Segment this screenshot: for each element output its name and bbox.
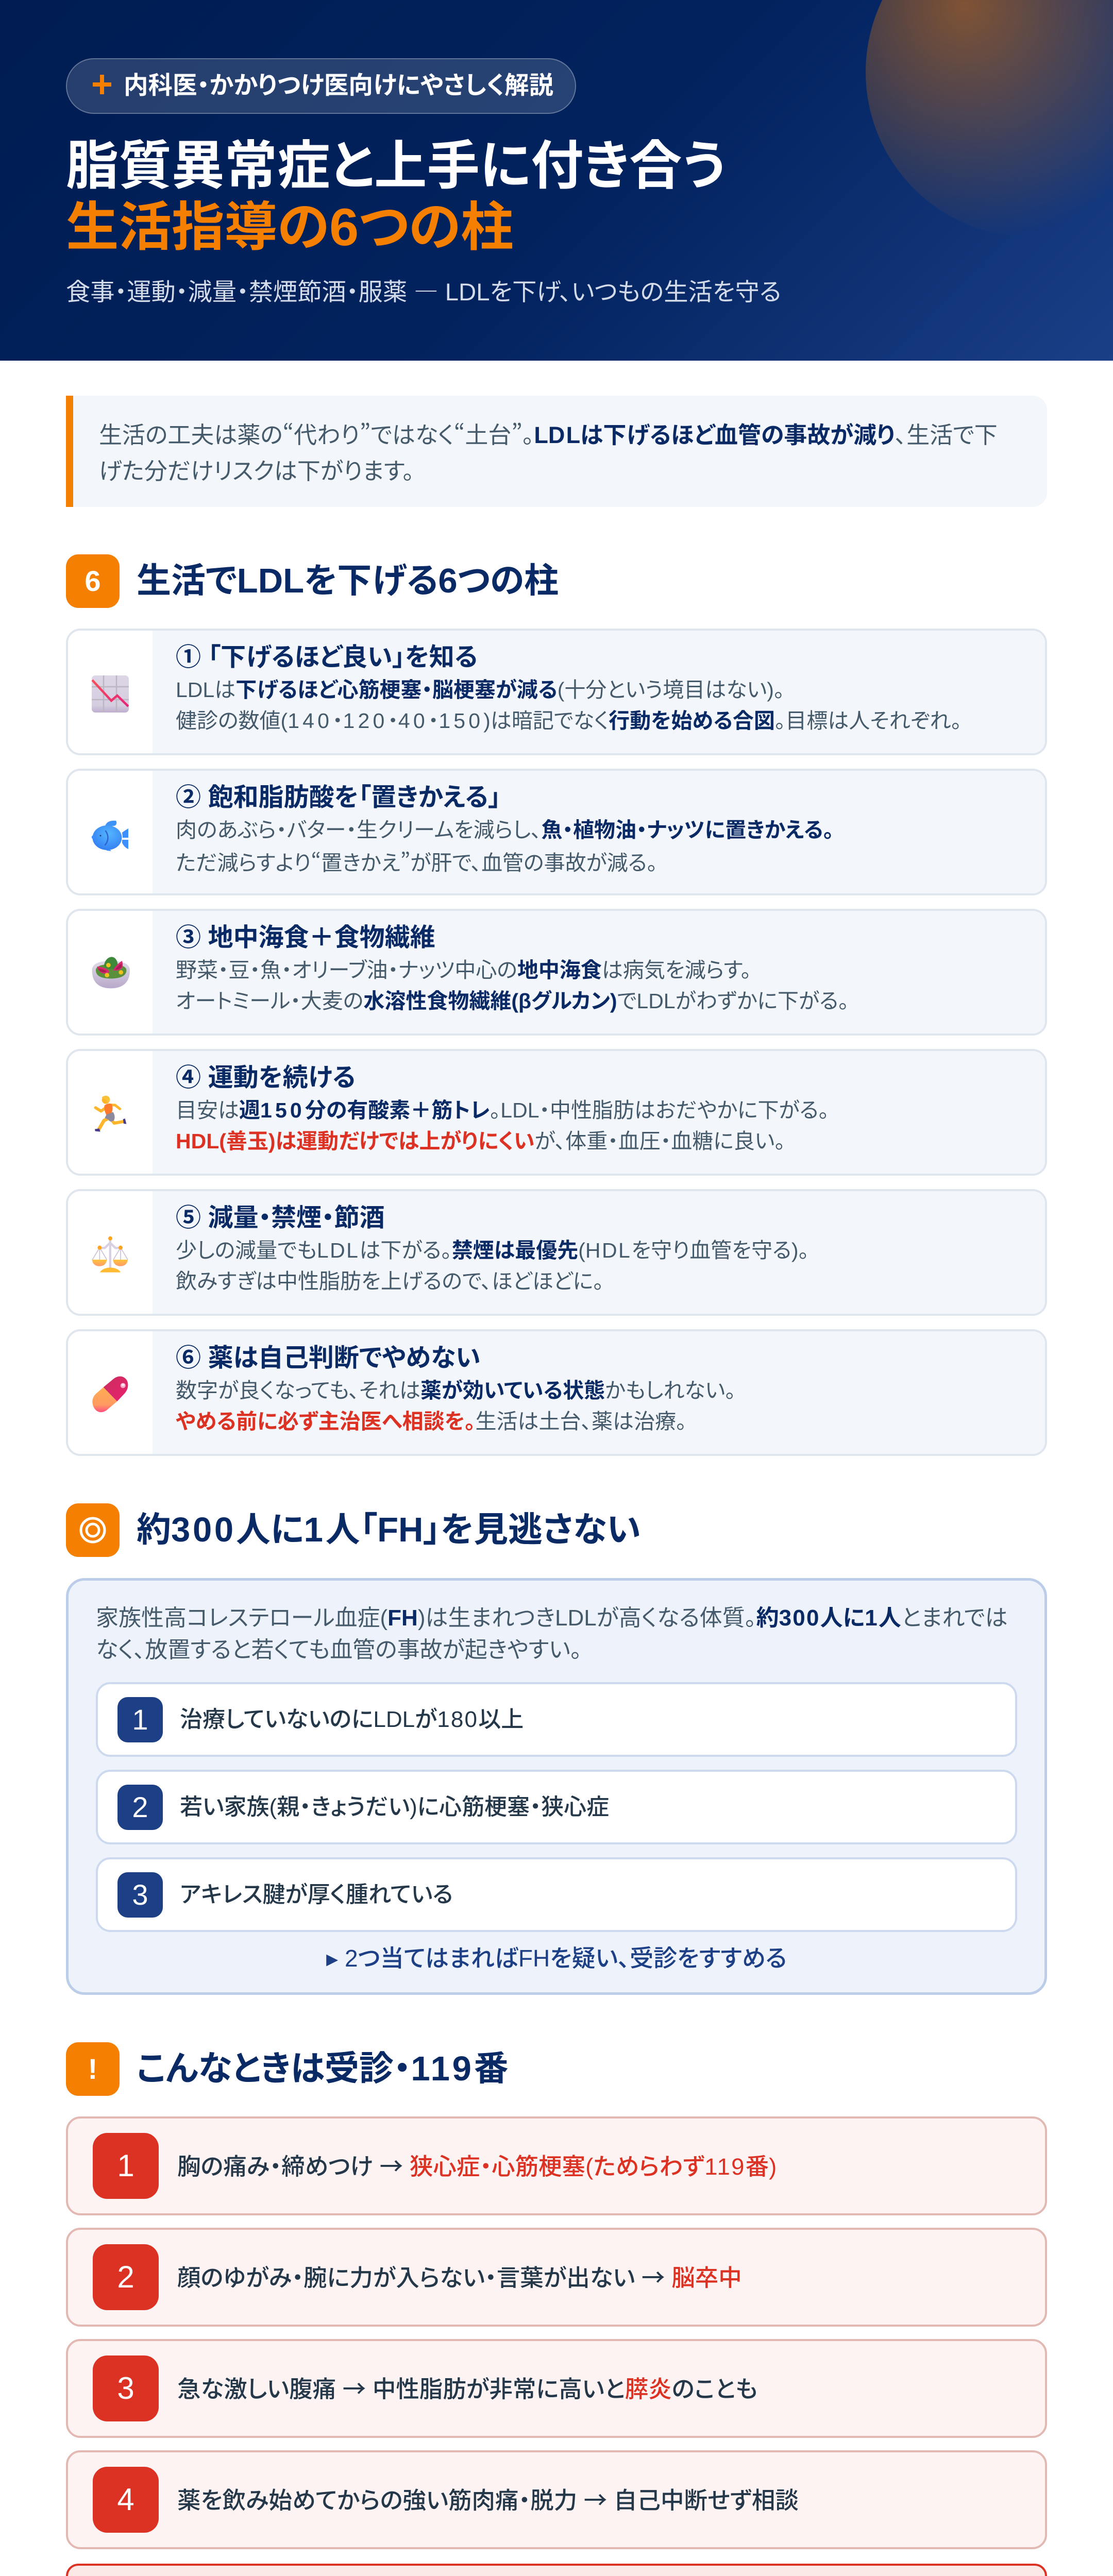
number 1: 1 <box>132 1703 148 1736</box>
number 2: 2 <box>117 2260 134 2294</box>
number 1: 1 <box>117 2148 134 2183</box>
pillar 6 line 2: やめる前に必ず主治医へ相談を。生活は土台、薬は治療。 <box>176 1410 686 1433</box>
icon: runner <box>94 1095 127 1132</box>
flag 1 text: 胸の痛み・締めつけ → 狭心症・心筋梗塞(ためらわず119番) <box>177 2148 777 2182</box>
FH checklist item 3 <box>96 1857 1017 1932</box>
number 1 <box>93 2133 159 2199</box>
number 2 <box>117 1785 163 1830</box>
flag 3 text: 急な激しい腹痛 → 中性脂肪が非常に高いと膵炎のことも <box>177 2370 757 2404</box>
pillar 3 title: ③ 地中海食＋食物繊維 <box>176 924 435 952</box>
pillar 2 title: ② 飽和脂肪酸を「置きかえる」 <box>176 784 501 811</box>
pillar 1 title: ① 「下げるほど良い」を知る <box>176 643 478 671</box>
FH description: なく、放置すると若くても血管の事故が起きやすい。 <box>96 1637 582 1663</box>
number 3 <box>93 2355 159 2421</box>
item 3 text: アキレス腱が厚く腫れている <box>180 1882 453 1907</box>
red flag 3 <box>66 2339 1047 2438</box>
heading text: こんなときは受診・119番 <box>137 2049 509 2088</box>
number 4: 4 <box>117 2482 134 2517</box>
pillar 3 line 1: 野菜・豆・魚・オリーブ油・ナッツ中心の地中海食は病気を減らす。 <box>176 958 751 982</box>
card: pillar 1 <box>66 629 1047 755</box>
title line 2: 生活指導の6つの柱 <box>66 197 514 257</box>
pillar 2 line 1: 肉のあぶら・バター・生クリームを減らし、魚・植物油・ナッツに置きかえる。 <box>176 818 834 842</box>
card: pillar 6 <box>66 1329 1047 1456</box>
item 2 text: 若い家族(親・きょうだい)に心筋梗塞・狭心症 <box>180 1794 609 1820</box>
icon: number 6 <box>66 554 120 608</box>
icon: capsule <box>92 1377 128 1412</box>
flag 2 text: 顔のゆがみ・腕に力が入らない・言葉が出ない → 脳卒中 <box>177 2259 742 2293</box>
icon: balance scale <box>92 1236 128 1273</box>
icon: salad bowl <box>92 957 130 988</box>
flag 4 text: 薬を飲み始めてからの強い筋肉痛・脱力 → 自己中断せず相談 <box>177 2482 799 2516</box>
pillar 5 line 1: 少しの減量でもLDLは下がる。禁煙は最優先(HDLを守り血管を守る)。 <box>176 1239 809 1262</box>
card: pillar 5 <box>66 1189 1047 1316</box>
card: pillar 4 <box>66 1049 1047 1176</box>
card: pillar 3 <box>66 909 1047 1036</box>
intro callout <box>66 396 1047 507</box>
panel: FH <box>66 1578 1047 1995</box>
red flag 4 <box>66 2450 1047 2549</box>
FH checklist item 2 <box>96 1770 1017 1844</box>
pillar 4 line 2: HDL(善玉)は運動だけでは上がりにくいが、体重・血圧・血糖に良い。 <box>176 1129 785 1153</box>
pillar 1 line 2: 健診の数値(140・120・40・150)は暗記でなく行動を始める合図。目標は人それぞれ。 <box>176 709 962 733</box>
decorative glow circle <box>866 0 1113 237</box>
number 3 <box>117 1872 163 1918</box>
pillar 6 line 1: 数字が良くなっても、それは薬が効いている状態かもしれない。 <box>176 1379 736 1402</box>
red flag 2 <box>66 2228 1047 2327</box>
number 3: 3 <box>132 1878 148 1911</box>
number 2: 2 <box>132 1791 148 1823</box>
icon: fish <box>92 820 128 851</box>
icon: plus <box>93 75 111 94</box>
icon: double circle <box>66 1503 120 1557</box>
title line 1: 脂質異常症と上手に付き合う <box>66 136 726 195</box>
heading text: 生活でLDLを下げる6つの柱 <box>137 562 559 600</box>
section heading: FH <box>66 1503 641 1557</box>
red flag 1 <box>66 2116 1047 2215</box>
warning banner <box>66 2564 1047 2576</box>
pillar 4 title: ④ 運動を続ける <box>176 1064 356 1092</box>
number 4 <box>93 2467 159 2533</box>
item 1 text: 治療していないのにLDLが180以上 <box>180 1707 524 1732</box>
callout text: 生活の工夫は薬の“代わり”ではなく“土台”。LDLは下げるほど血管の事故が減り、生活で下 <box>99 416 998 450</box>
callout text: げた分だけリスクは下がります。 <box>99 458 414 484</box>
pillar 3 line 2: オートミール・大麦の水溶性食物繊維(βグルカン)でLDLがわずかに下がる。 <box>176 989 849 1013</box>
badge text: 内科医・かかりつけ医向けにやさしく解説 <box>124 72 553 99</box>
subtitle: 食事・運動・減量・禁煙節酒・服薬 — LDLを下げ、いつもの生活を守る <box>66 272 781 308</box>
header panel <box>0 0 1113 361</box>
FH conclusion: ▸ 2つ当てはまればFHを疑い、受診をすすめる <box>326 1945 787 1972</box>
pillar 4 line 1: 目安は週150分の有酸素＋筋トレ。LDL・中性脂肪はおだやかに下がる。 <box>176 1098 829 1122</box>
pillar 2 line 2: ただ減らすより“置きかえ”が肝で、血管の事故が減る。 <box>176 845 657 876</box>
section heading: warning signs <box>66 2042 1047 2096</box>
icon: exclamation <box>66 2042 120 2096</box>
icon: exclamation: ! <box>88 2053 97 2085</box>
number 3: 3 <box>117 2371 134 2405</box>
pillar 5 line 2: 飲みすぎは中性脂肪を上げるので、ほどほどに。 <box>176 1269 604 1293</box>
number 1 <box>117 1697 163 1742</box>
card: pillar 2 <box>66 769 1047 895</box>
badge pill <box>66 58 576 114</box>
icon: falling chart <box>92 675 129 713</box>
number 2 <box>93 2244 159 2310</box>
pillar 6 title: ⑥ 薬は自己判断でやめない <box>176 1344 480 1372</box>
pillar 1 line 1: LDLは下げるほど心筋梗塞・脳梗塞が減る(十分という境目はない)。 <box>176 678 784 702</box>
icon: number 6: 6 <box>85 565 101 597</box>
FH description: 家族性高コレステロール血症(FH)は生まれつきLDLが高くなる体質。約300人に1人とまれでは <box>96 1605 1008 1631</box>
FH checklist item 1 <box>96 1682 1017 1757</box>
section heading: six pillars <box>66 554 559 608</box>
heading text: 約300人に1人「FH」を見逃さない <box>137 1511 641 1549</box>
callout text <box>99 416 998 484</box>
pillar 5 title: ⑤ 減量・禁煙・節酒 <box>176 1204 385 1232</box>
FH description <box>96 1602 1008 1666</box>
